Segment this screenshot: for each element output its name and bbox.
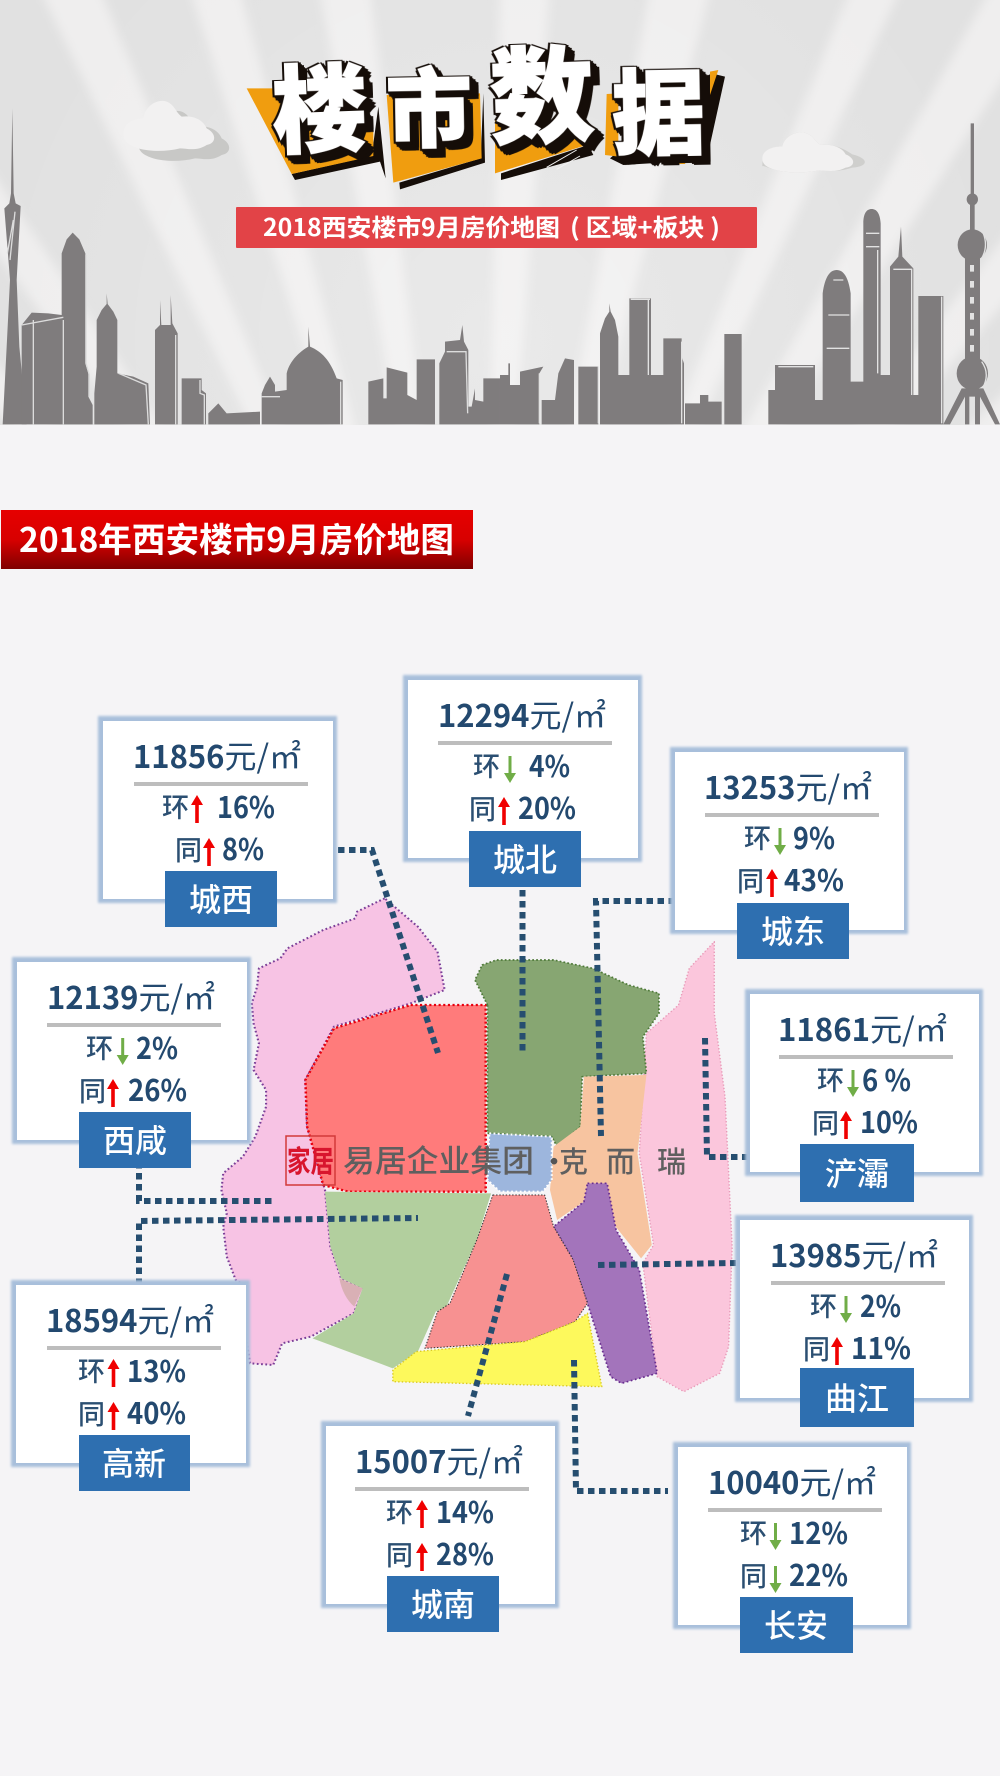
card: 城东: 同 xyxy=(737,860,764,899)
card: 高新: 13% xyxy=(127,1347,186,1391)
card: 曲江: 同 xyxy=(803,1328,830,1367)
card: 曲江: 曲江 xyxy=(825,1374,889,1420)
title block xyxy=(247,11,725,189)
region: 城西 red xyxy=(305,1005,486,1192)
watermark xyxy=(286,1136,686,1185)
card: 城东: 环 xyxy=(744,817,771,856)
card: 长安: 12% xyxy=(789,1509,848,1553)
card: 浐灞: 6 % xyxy=(862,1056,911,1100)
title characters: 数 xyxy=(487,11,596,166)
cloud: left xyxy=(123,101,229,161)
card: 城南: 14% xyxy=(436,1488,494,1532)
card: 高新: 同 xyxy=(78,1393,105,1432)
card: 浐灞: 浐灞 xyxy=(825,1149,889,1195)
subtitle banner xyxy=(236,207,757,248)
card: 长安: 长安 xyxy=(764,1601,828,1647)
card: 曲江: 11% xyxy=(851,1324,911,1368)
subtitle banner: ( 区域+板块 ) xyxy=(570,208,720,243)
title characters: 楼 xyxy=(269,33,369,174)
region: 城北 green xyxy=(475,960,659,1147)
card: 城东: 43% xyxy=(784,856,844,900)
card: 西咸 xyxy=(12,957,251,1168)
skyline silhouette: right half xyxy=(500,123,1000,424)
card: 城南: 城南 xyxy=(411,1580,475,1626)
card: 浐灞: 11861元/㎡ xyxy=(778,1005,947,1051)
subtitle banner: 2018西安楼市9月房价地图 xyxy=(263,208,560,243)
title characters: 据 xyxy=(611,38,706,175)
card: 高新 xyxy=(11,1280,250,1491)
card: 城西: 8% xyxy=(222,825,264,869)
watermark: 而 xyxy=(606,1139,635,1181)
card: 浐灞: 环 xyxy=(817,1059,844,1098)
card: 长安: 22% xyxy=(789,1551,848,1595)
card: 城南 xyxy=(321,1421,559,1632)
section heading banner: 2018年西安楼市9月房价地图 xyxy=(19,513,454,562)
title characters xyxy=(269,11,706,175)
card: 城西 xyxy=(98,716,337,927)
card: 西咸: 2% xyxy=(136,1024,178,1068)
card: 城西: 11856元/㎡ xyxy=(133,732,301,778)
watermark: 克 xyxy=(559,1139,588,1181)
card: 西咸: 西咸 xyxy=(103,1116,167,1162)
watermark: • xyxy=(541,1142,567,1179)
card: 高新: 环 xyxy=(78,1350,105,1389)
title characters: 市 xyxy=(385,39,473,166)
cloud: right xyxy=(762,132,865,172)
region: 城东 peach xyxy=(550,1075,652,1258)
card: 浐灞: 10% xyxy=(860,1098,918,1142)
region: overlap rose xyxy=(339,1278,362,1307)
card: 城南: 同 xyxy=(386,1534,413,1573)
card: 城西: 16% xyxy=(217,783,275,827)
region: 城内 blue xyxy=(487,1133,552,1192)
watermark: 易居企业集团 xyxy=(343,1136,534,1181)
card: 城南: 环 xyxy=(386,1491,413,1530)
card: 城北: 环 xyxy=(473,745,500,784)
card: 城东: 城东 xyxy=(761,907,825,953)
region: 曲江 purple xyxy=(554,1183,657,1383)
card: 浐灞: 同 xyxy=(812,1102,839,1141)
card: 浐灞 xyxy=(745,989,983,1202)
region: 浐灞 pink xyxy=(639,942,732,1392)
orange title backing shapes xyxy=(247,70,725,189)
card: 城南: 15007元/㎡ xyxy=(355,1437,523,1483)
card: 曲江: 环 xyxy=(810,1285,837,1324)
card: 长安: 10040元/㎡ xyxy=(708,1458,876,1504)
card: 西咸: 环 xyxy=(86,1027,113,1066)
card: 曲江: 13985元/㎡ xyxy=(770,1231,938,1277)
card: 城西: 同 xyxy=(175,829,202,868)
card: 城北 xyxy=(403,675,642,887)
district map xyxy=(221,898,732,1392)
card: 长安: 环 xyxy=(740,1512,767,1551)
region: 高新 light green xyxy=(312,1192,491,1368)
watermark: 瑞 xyxy=(657,1139,686,1181)
card: 城南: 28% xyxy=(436,1530,494,1574)
card: 高新: 18594元/㎡ xyxy=(46,1296,214,1342)
region: 长安 yellow xyxy=(393,1313,602,1387)
card: 西咸: 26% xyxy=(128,1066,187,1110)
card: 高新: 高新 xyxy=(102,1439,166,1485)
skyline silhouette: left half xyxy=(3,108,500,424)
card: 曲江: 2% xyxy=(860,1282,901,1326)
card: 城东: 13253元/㎡ xyxy=(704,763,872,809)
region: 西咸 pink xyxy=(221,898,445,1365)
card: 高新: 40% xyxy=(127,1389,186,1433)
card: 曲江 xyxy=(735,1215,973,1427)
card: 城西: 城西 xyxy=(189,875,253,921)
card: 城北: 12294元/㎡ xyxy=(438,691,606,737)
card: 城西: 环 xyxy=(162,786,189,825)
card: 长安: 同 xyxy=(740,1555,767,1594)
card: 西咸: 同 xyxy=(79,1070,106,1109)
card: 城东 xyxy=(670,747,908,959)
card: 城北: 同 xyxy=(469,788,496,827)
card: 城东: 9% xyxy=(793,814,835,858)
card: 城北: 20% xyxy=(518,784,576,828)
connector lines xyxy=(139,850,750,1491)
card: 长安 xyxy=(673,1442,911,1653)
watermark: 家居 xyxy=(287,1137,334,1181)
region: 城南 salmon xyxy=(425,1195,587,1348)
card: 城北: 4% xyxy=(529,742,570,786)
card: 西咸: 12139元/㎡ xyxy=(47,973,215,1019)
card: 城北: 城北 xyxy=(493,835,557,881)
header background with rays xyxy=(0,0,1000,425)
